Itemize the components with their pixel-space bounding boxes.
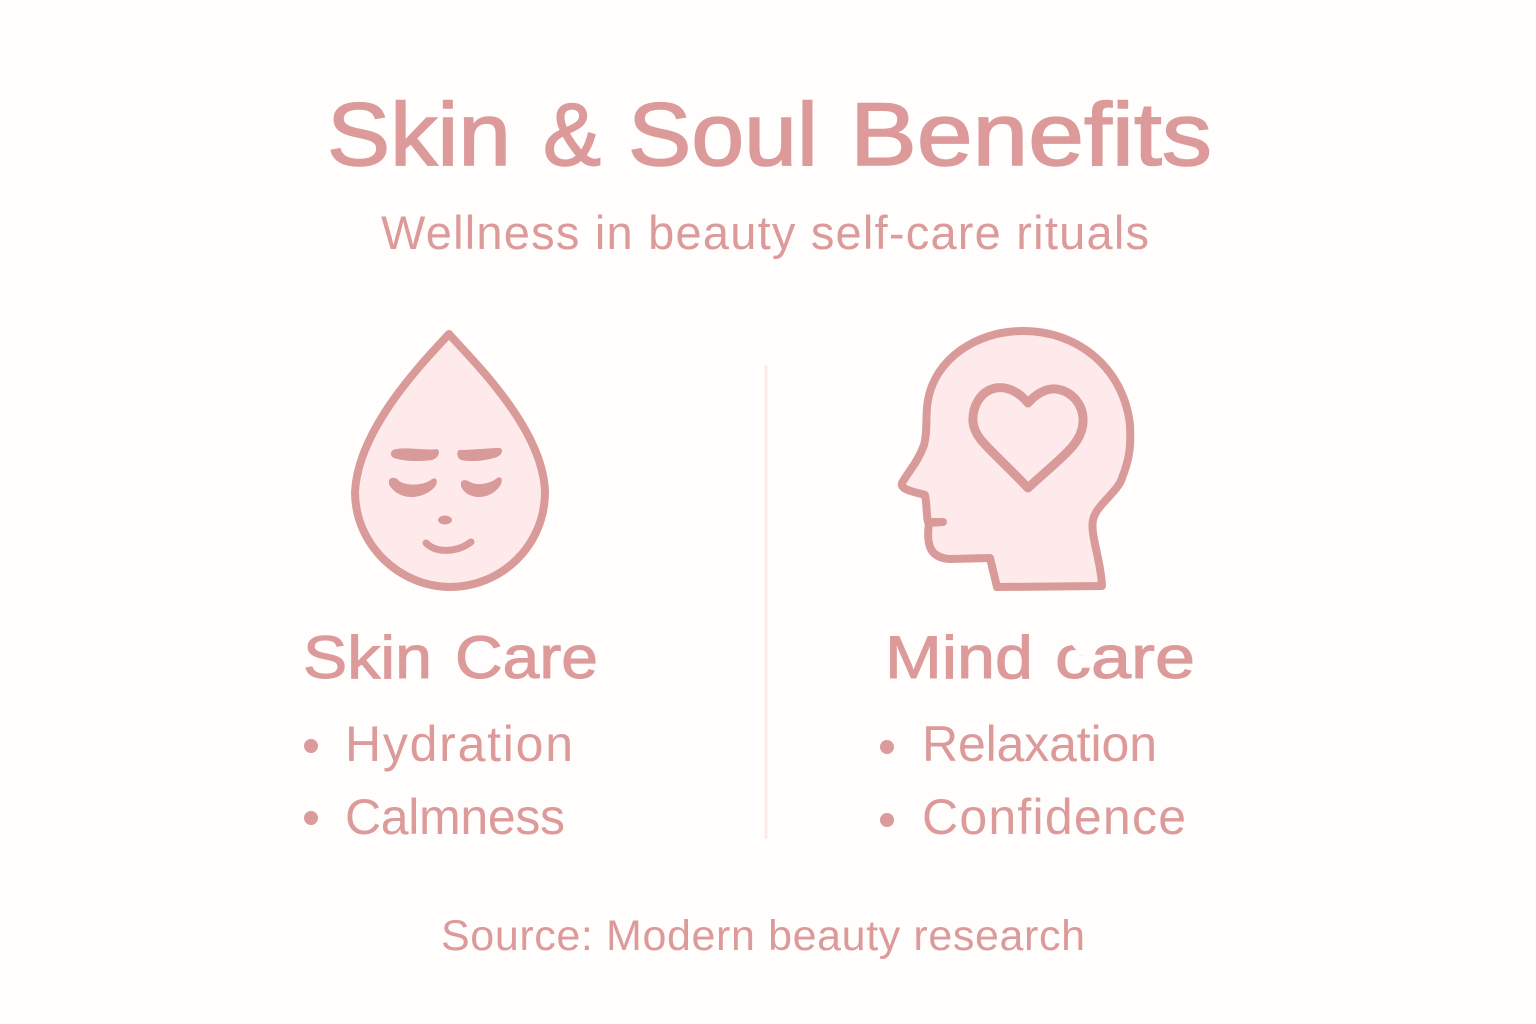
heading: mind care: care [1055,624,1195,691]
heading: skin care: Care [455,624,598,691]
heading: mind care [885,624,1195,691]
title: Skin [327,84,511,184]
list: mind care benefits [880,716,1186,845]
list: mind care benefits: Confidence [922,789,1186,845]
list: skin care benefits: Hydration [345,716,573,772]
list: skin care benefits [304,716,573,845]
subtitle: Wellness in beauty self-care rituals [381,206,1149,259]
source note: Source: Modern beauty research [441,912,1085,960]
heading: skin care [303,624,598,691]
panel: skin care [303,334,598,845]
list: skin care benefits: Calmness [345,789,565,845]
title: Soul [628,84,818,184]
title: Benefits [850,84,1212,184]
title [327,84,1212,184]
panel: mind care [880,331,1195,845]
heading: mind care: Mind [885,624,1033,691]
icon: head with heart [902,331,1130,587]
list: mind care benefits: Relaxation [922,716,1157,772]
heading: skin care: Skin [303,624,432,691]
title: & [543,84,601,184]
icon: water drop with calm face [355,334,545,587]
